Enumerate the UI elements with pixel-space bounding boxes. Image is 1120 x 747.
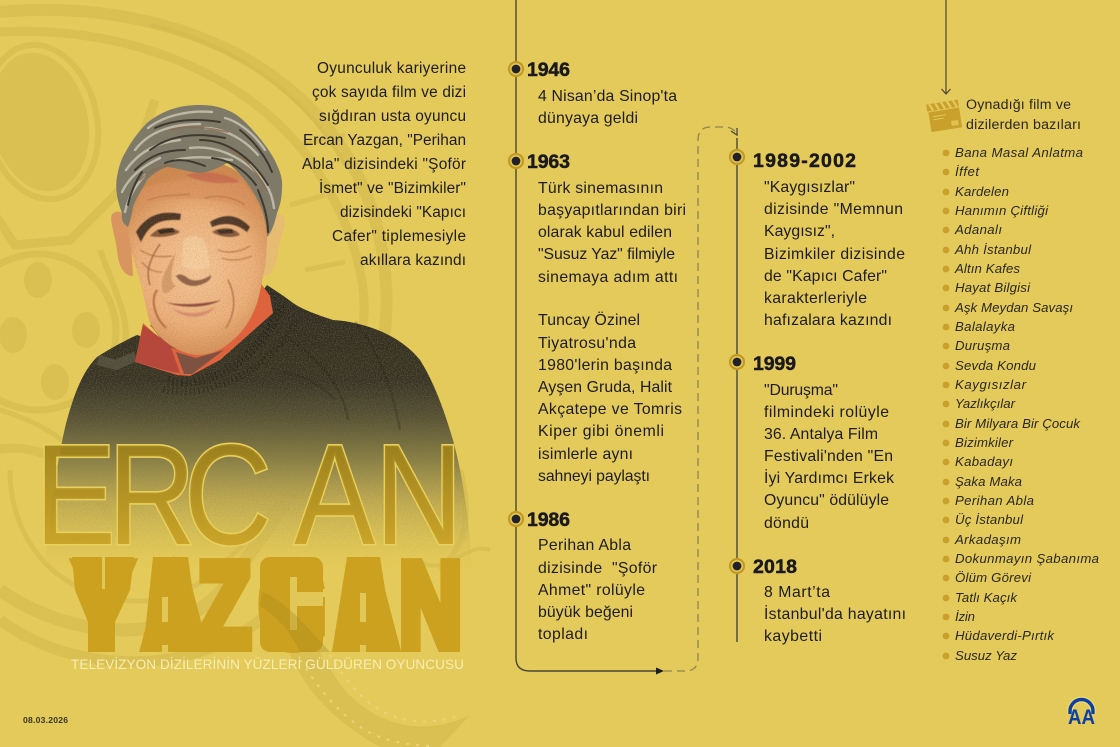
description: büyük beğeni: [538, 604, 633, 621]
year: 1989-2002: [753, 150, 856, 172]
intro text block: Cafer" tiplemesiyle: [332, 228, 466, 245]
marker: [509, 62, 523, 76]
film list: Duruşma: [955, 338, 1010, 353]
film list: Kardelen: [955, 184, 1009, 199]
year: 2018: [753, 556, 797, 578]
intro text block: akıllara kazındı: [360, 252, 466, 269]
year: 1999: [753, 353, 796, 375]
description: Akçatepe ve Tomris: [538, 401, 682, 418]
film list heading: Oynadığı film ve: [966, 97, 1071, 113]
film list: İffet: [955, 164, 980, 179]
description: isimlerle aynı: [538, 446, 633, 463]
film list: Hanımın Çiftliği: [955, 203, 1049, 218]
intro text block: Ercan Yazgan, "Perihan: [303, 132, 466, 149]
description: Tiyatrosu'nda: [538, 335, 636, 352]
description: [764, 179, 905, 329]
description: Oyuncu" ödülüyle: [764, 492, 889, 509]
year: 1963: [527, 151, 570, 173]
description: 36. Antalya Film: [764, 426, 878, 443]
description: 4 Nisan’da Sinop'ta: [538, 88, 677, 105]
film list: Balalayka: [955, 319, 1015, 334]
timeline entry: 1946: [509, 59, 677, 127]
shirt collar: [135, 282, 273, 376]
description: karakterleriyle: [764, 290, 867, 307]
film list heading: dizilerden bazıları: [966, 117, 1081, 133]
film list: Arkadaşım: [954, 532, 1021, 547]
timeline entry: 1989-2002: [730, 150, 905, 329]
description: başyapıtlarından biri: [538, 202, 686, 219]
description: olarak kabul edilen: [538, 224, 672, 241]
film list heading: [966, 97, 1081, 133]
timeline entry: 1986: [509, 509, 657, 643]
timeline connector: left column line with arrow: [516, 0, 664, 674]
film list: Bana Masal Anlatma: [955, 145, 1083, 160]
description: [764, 584, 906, 645]
timeline entry: 2018: [730, 556, 906, 645]
description: de "Kapıcı Cafer": [764, 268, 887, 285]
intro text block: çok sayıda film ve dizi: [312, 84, 466, 101]
timeline entry: 1963: [509, 151, 686, 485]
film list: Kabadayı: [955, 454, 1013, 469]
film list: Ölüm Görevi: [955, 570, 1032, 585]
description: [538, 537, 657, 643]
description: dünyaya geldi: [538, 110, 638, 127]
timeline entry: 1999: [730, 353, 894, 532]
face: [128, 160, 267, 355]
description: Bizimkiler dizisinde: [764, 246, 905, 263]
intro text block: dizisindeki "Kapıcı: [340, 204, 466, 221]
description: "Susuz Yaz" filmiyle: [538, 246, 675, 263]
film strip watermark: [262, 590, 470, 747]
film list: Adanalı: [954, 222, 1002, 237]
description: Festivali'nden "En: [764, 448, 893, 465]
neck: [150, 310, 245, 375]
name: ERCAN: ERCAN: [35, 416, 463, 575]
marker: [509, 512, 523, 526]
year: 1986: [527, 509, 570, 531]
film list: Sevda Kondu: [955, 358, 1037, 373]
sweater: [44, 285, 472, 570]
intro text block: [302, 60, 466, 269]
description: 1980'lerin başında: [538, 357, 672, 374]
marker: [730, 559, 744, 573]
description: İyi Yardımcı Erkek: [764, 468, 894, 487]
intro text block: Oyunculuk kariyerine: [317, 60, 466, 77]
name: YAZGAN: YAZGAN: [75, 538, 461, 671]
background film reel watermark: [0, 10, 490, 662]
film list: Kaygısızlar: [955, 377, 1027, 392]
film list: [943, 145, 1099, 663]
face details: [136, 172, 262, 328]
film list: Yazlıkçılar: [955, 396, 1016, 411]
portrait photo: [44, 105, 472, 570]
description: filmindeki rolüyle: [764, 404, 889, 421]
description: hafızalara kazındı: [764, 312, 892, 329]
marker: [730, 355, 744, 369]
description: [538, 88, 677, 127]
description: [538, 180, 686, 485]
film list: Dokunmayın Şabanıma: [955, 551, 1099, 566]
hair: [116, 105, 282, 237]
description: topladı: [538, 626, 588, 643]
subtitle: TELEVİZYON DİZİLERİNİN YÜZLERİ GÜLDÜREN OYUNCUSU: [71, 657, 464, 672]
description: 8 Mart’ta: [764, 584, 830, 601]
letter backing blocks: [72, 557, 395, 652]
description: Kiper gibi önemli: [538, 423, 664, 440]
film list: Perihan Abla: [955, 493, 1034, 508]
film list: Şaka Maka: [955, 474, 1022, 489]
description: İstanbul'da hayatını: [764, 604, 906, 623]
description: Ayşen Gruda, Halit: [538, 379, 673, 396]
film list: Ahh İstanbul: [954, 242, 1032, 257]
description: "Kaygısızlar": [764, 179, 855, 196]
film list: Hayat Bilgisi: [955, 280, 1031, 295]
film list: İzin: [955, 609, 975, 624]
description: dizisinde "Memnun: [764, 201, 903, 218]
film list: Üç İstanbul: [955, 512, 1024, 527]
letter slits: [102, 557, 366, 652]
sweater shading: [98, 304, 400, 430]
description: Perihan Abla: [538, 537, 631, 554]
film strip overlay on name: [260, 592, 330, 652]
film list: Bizimkiler: [955, 435, 1014, 450]
intro text block: sığdıran usta oyuncu: [319, 108, 466, 125]
intro text block: Abla" dizisindeki "Şoför: [302, 156, 466, 173]
description: Türk sinemasının: [538, 180, 663, 197]
description: Kaygısız",: [764, 223, 835, 240]
arrow to film list: [942, 0, 950, 94]
timeline connector: right column line: [736, 138, 738, 642]
description: [764, 382, 894, 532]
description: Ahmet" rolüyle: [538, 582, 645, 599]
description: "Duruşma": [764, 382, 838, 399]
film list: Aşk Meydan Savaşı: [954, 300, 1073, 315]
intro text block: İsmet" ve "Bizimkiler": [319, 179, 466, 197]
year: 1946: [527, 59, 570, 81]
film list: Tatlı Kaçık: [955, 590, 1018, 605]
film list: Hüdaverdi-Pırtık: [955, 628, 1055, 643]
film list: Bir Milyara Bir Çocuk: [955, 416, 1081, 431]
marker: [509, 154, 523, 168]
description: Tuncay Özinel: [538, 311, 640, 329]
film list: Altın Kafes: [954, 261, 1020, 276]
logo: AA: AA: [1068, 706, 1095, 729]
description: kaybetti: [764, 628, 822, 645]
description: sahneyi paylaştı: [538, 468, 650, 485]
marker: [730, 150, 744, 164]
description: dizisinde "Şoför: [538, 560, 657, 577]
icon: film clapperboard: [926, 100, 962, 132]
description: döndü: [764, 515, 809, 532]
film list: Susuz Yaz: [955, 648, 1017, 663]
date: 08.03.2026: [23, 715, 68, 725]
ears: [111, 212, 133, 276]
timeline connector: dashed link between columns: [664, 127, 737, 671]
description: sinemaya adım attı: [538, 269, 678, 286]
